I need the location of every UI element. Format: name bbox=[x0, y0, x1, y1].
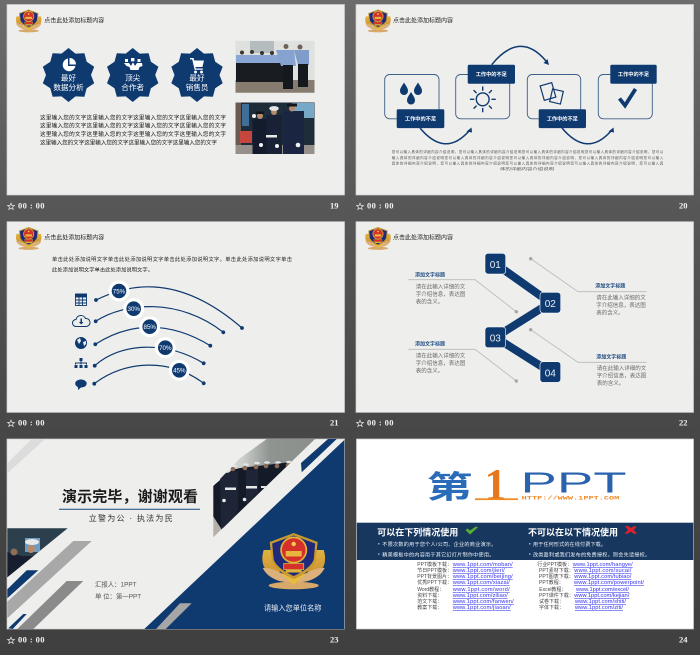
logo: 第1PPT: PPT bbox=[520, 468, 627, 500]
link list left: www.1ppt.com/fanwen/ bbox=[452, 599, 514, 605]
link list left: 优秀PPT下载： bbox=[417, 579, 452, 586]
reporter info: 汇报人：1PPT bbox=[95, 579, 137, 588]
icon: police emblem bbox=[16, 227, 41, 250]
footer: slide 21 bbox=[8, 418, 338, 428]
badge: top partners bbox=[107, 48, 158, 102]
leader lines bbox=[408, 259, 647, 381]
unit name: 请输入您单位名称 bbox=[264, 604, 321, 612]
text block bbox=[392, 149, 664, 171]
callout: upper left bbox=[415, 271, 466, 305]
reporter info: 单 位：第一PPT bbox=[95, 591, 141, 600]
grey strip large bbox=[7, 541, 92, 618]
badge text: 合作者 bbox=[121, 82, 144, 92]
marker 30%: 30% bbox=[128, 306, 140, 313]
icon: large police emblem bbox=[262, 533, 325, 589]
step 04 bbox=[540, 362, 561, 382]
label 2 bbox=[468, 65, 515, 84]
link list right: www.1ppt.com/sucai/ bbox=[573, 568, 632, 574]
link list right: PPT素材下载： bbox=[539, 567, 574, 574]
marker 85%: 85% bbox=[144, 324, 156, 331]
step 03 bbox=[485, 327, 506, 348]
logo: 第1PPT: 第 bbox=[426, 470, 472, 505]
link list right bbox=[537, 561, 644, 611]
arrow: 1 to 2 bbox=[420, 128, 472, 144]
footer: slide 20 bbox=[357, 200, 688, 210]
icon: speech bubble bbox=[75, 380, 87, 390]
callout: upper left: 添加文字标题 bbox=[415, 271, 445, 278]
link list left: PPT模板下载： bbox=[417, 561, 452, 568]
icon: police emblem bbox=[365, 10, 391, 32]
text block: 您可以输入具体的详细内容介绍说明，您可以输入具体的详细内容介绍说明您可以输入具体的详细内容介绍说明您可以输入具体的详细内容介绍说明，您可以 bbox=[392, 149, 664, 154]
link list right: www.1ppt.com/shiti/ bbox=[574, 599, 626, 605]
light strip top left bbox=[7, 439, 45, 473]
label 3: 工作中的不足 bbox=[547, 114, 579, 122]
logo: 第1PPT: HTTP://WWW.1PPT.COM bbox=[522, 496, 619, 502]
badge text: 数据分析 bbox=[53, 82, 84, 92]
intro text: 此处添加说明文字单击此处添加说明文字。 bbox=[52, 266, 153, 274]
panel: slide 22 bbox=[356, 222, 694, 412]
callout: lower right: 请在此输入详细的文 bbox=[597, 364, 647, 372]
icon: pie chart bbox=[63, 58, 76, 71]
usage banner bbox=[357, 523, 693, 560]
callout: lower left bbox=[415, 340, 466, 374]
link list left: www.1ppt.com/jieri/ bbox=[452, 568, 505, 574]
box: drops bbox=[385, 74, 439, 119]
label 4: 工作中的不足 bbox=[618, 70, 650, 78]
link list right: PPT教程： bbox=[539, 579, 564, 586]
link list left: www.1ppt.com/jiaoan/ bbox=[452, 605, 511, 611]
subtitle: 立警为公 · 执法为民 bbox=[89, 513, 173, 523]
box: sun bbox=[456, 74, 510, 119]
callout: lower right: 表的含义。 bbox=[597, 379, 624, 387]
icon: team bbox=[124, 58, 142, 70]
text block: 具体的详细内容介绍说明，您可以输入具体的详细内容介绍说明您可以输入具体的详细内容介绍说明您可以输入具体的详细内容介绍说明，您可以输入具 bbox=[392, 160, 664, 166]
callout: upper left: 请在此输入详细的文 bbox=[416, 282, 466, 290]
link list left: 教案下载： bbox=[417, 604, 442, 611]
link list left: www.1ppt.com/ziliao/ bbox=[452, 593, 508, 599]
link list left: www.1ppt.com/word/ bbox=[452, 587, 510, 593]
text block: 这里输入您的文字这里输入您的文字这里输入您的文字这里输入您的文字 bbox=[40, 122, 226, 130]
icon: network bbox=[74, 358, 88, 368]
footer: slide 19 bbox=[8, 200, 338, 210]
link list right: www.1ppt.com/excel/ bbox=[575, 587, 629, 593]
panel: slide 19 bbox=[7, 4, 344, 195]
link list left: PPT背景图片： bbox=[417, 573, 452, 580]
slide title: 点击此处添加标题内容 bbox=[393, 234, 453, 242]
footer: slide 21: 00 : 00 bbox=[18, 418, 45, 428]
callout: upper right: 表的含义。 bbox=[596, 308, 624, 316]
arrow: 2 to 3 bbox=[492, 46, 549, 65]
label 1 bbox=[397, 109, 444, 128]
footer: slide 20: 20 bbox=[679, 200, 688, 210]
callout: upper right: 字介绍信息，表达图 bbox=[596, 301, 646, 309]
photo: officers bbox=[7, 528, 68, 580]
logo: 第1PPT: 1 bbox=[484, 460, 506, 509]
intro text: 单击此处添加说明文字单击此处添加说明文字单击此处添加说明文字。单击此处添加说明文字单击 bbox=[52, 255, 292, 263]
navy strip top right bbox=[301, 439, 337, 472]
text block: 这里输入您的文字这里输入您的文字这里输入您的文字这里输入您的文字 bbox=[40, 114, 226, 122]
link list right: www.1ppt.com/hangye/ bbox=[572, 562, 633, 568]
badge text: 最好 bbox=[189, 72, 205, 82]
allowed list: 不限次数的用于您个人/公司、企业的商业演示。 bbox=[382, 541, 496, 548]
icon: police emblem bbox=[16, 10, 41, 32]
navy strip bottom left bbox=[8, 614, 27, 629]
step 03: 03 bbox=[490, 334, 501, 345]
logo: 第1PPT bbox=[426, 460, 627, 509]
marker 70%: 70% bbox=[159, 345, 172, 352]
marker 45%: 45% bbox=[173, 368, 186, 375]
page number: slide 24: 24 bbox=[679, 634, 688, 644]
icon: globe bbox=[75, 337, 87, 349]
badge: data analysis bbox=[43, 48, 94, 102]
step 02 bbox=[540, 292, 561, 313]
icon: sun bbox=[470, 87, 495, 112]
text block: 这里输入您的文字这里输入您的文字这里输入您的文字这里输入您的文字 bbox=[40, 138, 217, 146]
marker 30% bbox=[123, 298, 144, 319]
arrow: 3 to 4 bbox=[562, 128, 614, 144]
heading: allowed: 可以在下列情况使用 bbox=[377, 526, 458, 538]
navy triangle bbox=[144, 440, 344, 629]
icon: water drops bbox=[400, 82, 422, 104]
step 01 bbox=[485, 253, 506, 274]
connector zigzag bbox=[495, 264, 550, 372]
grey strip in navy bbox=[156, 603, 192, 629]
link list right: Excel教程： bbox=[539, 586, 567, 593]
allowed list: 精美模板中的内容用于其它幻灯片制作中使用。 bbox=[382, 551, 494, 558]
callout: lower left: 添加文字标题 bbox=[415, 340, 445, 347]
callout: lower left: 表的含义。 bbox=[416, 366, 443, 374]
title: 演示完毕，谢谢观看 bbox=[62, 488, 198, 506]
label 2: 工作中的不足 bbox=[476, 70, 508, 78]
step 04: 04 bbox=[545, 368, 556, 379]
footer: slide 23 bbox=[8, 634, 338, 644]
text block: 体的详细内容介绍说明 bbox=[500, 166, 555, 171]
footer: slide 22: 00 : 00 bbox=[367, 418, 394, 428]
icon: check mark bbox=[620, 89, 636, 106]
callout: upper right bbox=[595, 283, 646, 316]
link list right: www.1ppt.com/powerpoint/ bbox=[573, 580, 644, 586]
label 1: 工作中的不足 bbox=[405, 114, 437, 122]
box: papers bbox=[527, 74, 581, 119]
heading: not allowed: 不可以在以下情况使用 bbox=[528, 526, 618, 538]
link list right: PPT图表下载： bbox=[539, 573, 574, 580]
footer: slide 21: 21 bbox=[330, 418, 338, 428]
footer: slide 22: 22 bbox=[679, 418, 688, 428]
icon: shopping cart bbox=[190, 58, 204, 74]
photo: police formation bbox=[213, 439, 316, 538]
text block bbox=[40, 114, 226, 146]
callout: lower right bbox=[596, 353, 647, 387]
grey strip dark bbox=[17, 581, 83, 629]
allowed list bbox=[378, 541, 496, 558]
slide title: 点击此处添加标题内容 bbox=[44, 16, 104, 24]
footer: slide 19: 00 : 00 bbox=[18, 200, 45, 210]
arc end dots bbox=[92, 298, 244, 386]
callout: lower right: 字介绍信息，表达图 bbox=[597, 371, 647, 379]
icon: red cross bbox=[624, 526, 637, 534]
text block: 这里输入您的文字这里输入您的文字这里输入您的文字这里输入您的文字 bbox=[40, 130, 226, 138]
arc chart bbox=[92, 280, 244, 386]
footer: slide 23: 23 bbox=[330, 634, 338, 644]
callout: upper right: 请在此输入详细的文 bbox=[596, 293, 646, 301]
link list right: PPT课件下载： bbox=[539, 592, 574, 599]
panel: slide 21 bbox=[7, 222, 344, 412]
slide title: 点击此处添加标题内容 bbox=[393, 16, 453, 24]
link list left: 资料下载： bbox=[417, 592, 442, 599]
label 3 bbox=[539, 109, 586, 128]
photo: saluting officers bbox=[235, 102, 315, 154]
link list left: www.1ppt.com/xiazai/ bbox=[452, 580, 510, 586]
footer: slide 22 bbox=[357, 418, 688, 428]
box: check bbox=[598, 74, 652, 119]
link list left: 节日PPT模板： bbox=[417, 567, 452, 574]
link list right: www.1ppt.com/tubiao/ bbox=[573, 574, 632, 580]
marker 75%: 75% bbox=[113, 288, 126, 295]
photo: marching police bbox=[235, 40, 315, 93]
label 4 bbox=[610, 65, 657, 84]
step 02: 02 bbox=[545, 299, 556, 310]
not-allowed list bbox=[529, 541, 650, 558]
intro text bbox=[52, 255, 292, 274]
marker 70% bbox=[155, 337, 176, 358]
text block: 输入具体的详细内容介绍说明您可以输入具体的详细内容介绍说明您可以输入具体的详细内容介绍说明，您可以输入具体的详细内容介绍说明您可以输入 bbox=[392, 155, 664, 160]
link list right: 试卷下载： bbox=[539, 598, 564, 605]
panel: slide 20 bbox=[356, 4, 694, 195]
marker 45% bbox=[169, 360, 190, 381]
link list left bbox=[417, 561, 514, 611]
icon: papers bbox=[540, 83, 563, 104]
marker 75% bbox=[108, 280, 130, 302]
marker 85% bbox=[139, 316, 160, 337]
callout: lower right: 添加文字标题 bbox=[596, 353, 626, 360]
icon: cloud download bbox=[72, 315, 90, 326]
link list left: Word教程： bbox=[417, 586, 444, 593]
footer: slide 23: 00 : 00 bbox=[18, 634, 45, 644]
icon: calendar bbox=[76, 294, 86, 306]
link list right: www.1ppt.com/kejian/ bbox=[573, 593, 630, 599]
callout: upper right: 添加文字标题 bbox=[595, 283, 625, 290]
callout: lower left: 请在此输入详细的文 bbox=[416, 351, 466, 359]
icon: police emblem bbox=[365, 227, 391, 250]
slide title: 点击此处添加标题内容 bbox=[44, 234, 104, 242]
not-allowed list: 改类盈利或我们发布的免费授权，则会先请授权。 bbox=[533, 551, 650, 558]
badge text: 最好 bbox=[61, 72, 76, 82]
link list right: www.1ppt.com/ziti/ bbox=[574, 605, 623, 611]
footer: slide 20: 00 : 00 bbox=[367, 200, 394, 210]
leader dots bbox=[515, 257, 532, 383]
step 01: 01 bbox=[490, 260, 501, 271]
not-allowed list: 用于任何形式的在线付费下载。 bbox=[533, 541, 606, 548]
link list left: www.1ppt.com/moban/ bbox=[452, 562, 513, 568]
link list right: 行业PPT模板： bbox=[537, 561, 572, 568]
panel: slide 23 bbox=[7, 439, 344, 629]
footer: slide 19: 19 bbox=[330, 200, 338, 210]
callout: upper left: 表的含义。 bbox=[416, 297, 443, 305]
callout: upper left: 字介绍信息，表达图 bbox=[416, 290, 466, 298]
link list left: www.1ppt.com/beijing/ bbox=[452, 574, 513, 580]
icon: green check bbox=[466, 526, 478, 534]
reporter info bbox=[95, 579, 141, 600]
callout: lower left: 字介绍信息，表达图 bbox=[416, 359, 466, 367]
panel: slide 24 bbox=[356, 439, 694, 629]
badge text: 销售员 bbox=[186, 82, 209, 92]
title rule bbox=[59, 509, 200, 510]
link list right: 字体下载： bbox=[539, 604, 564, 611]
navy strip left bbox=[7, 570, 38, 598]
badge text: 顶尖 bbox=[125, 72, 141, 82]
link list left: 范文下载： bbox=[417, 598, 442, 605]
badge: best sales bbox=[171, 48, 223, 102]
